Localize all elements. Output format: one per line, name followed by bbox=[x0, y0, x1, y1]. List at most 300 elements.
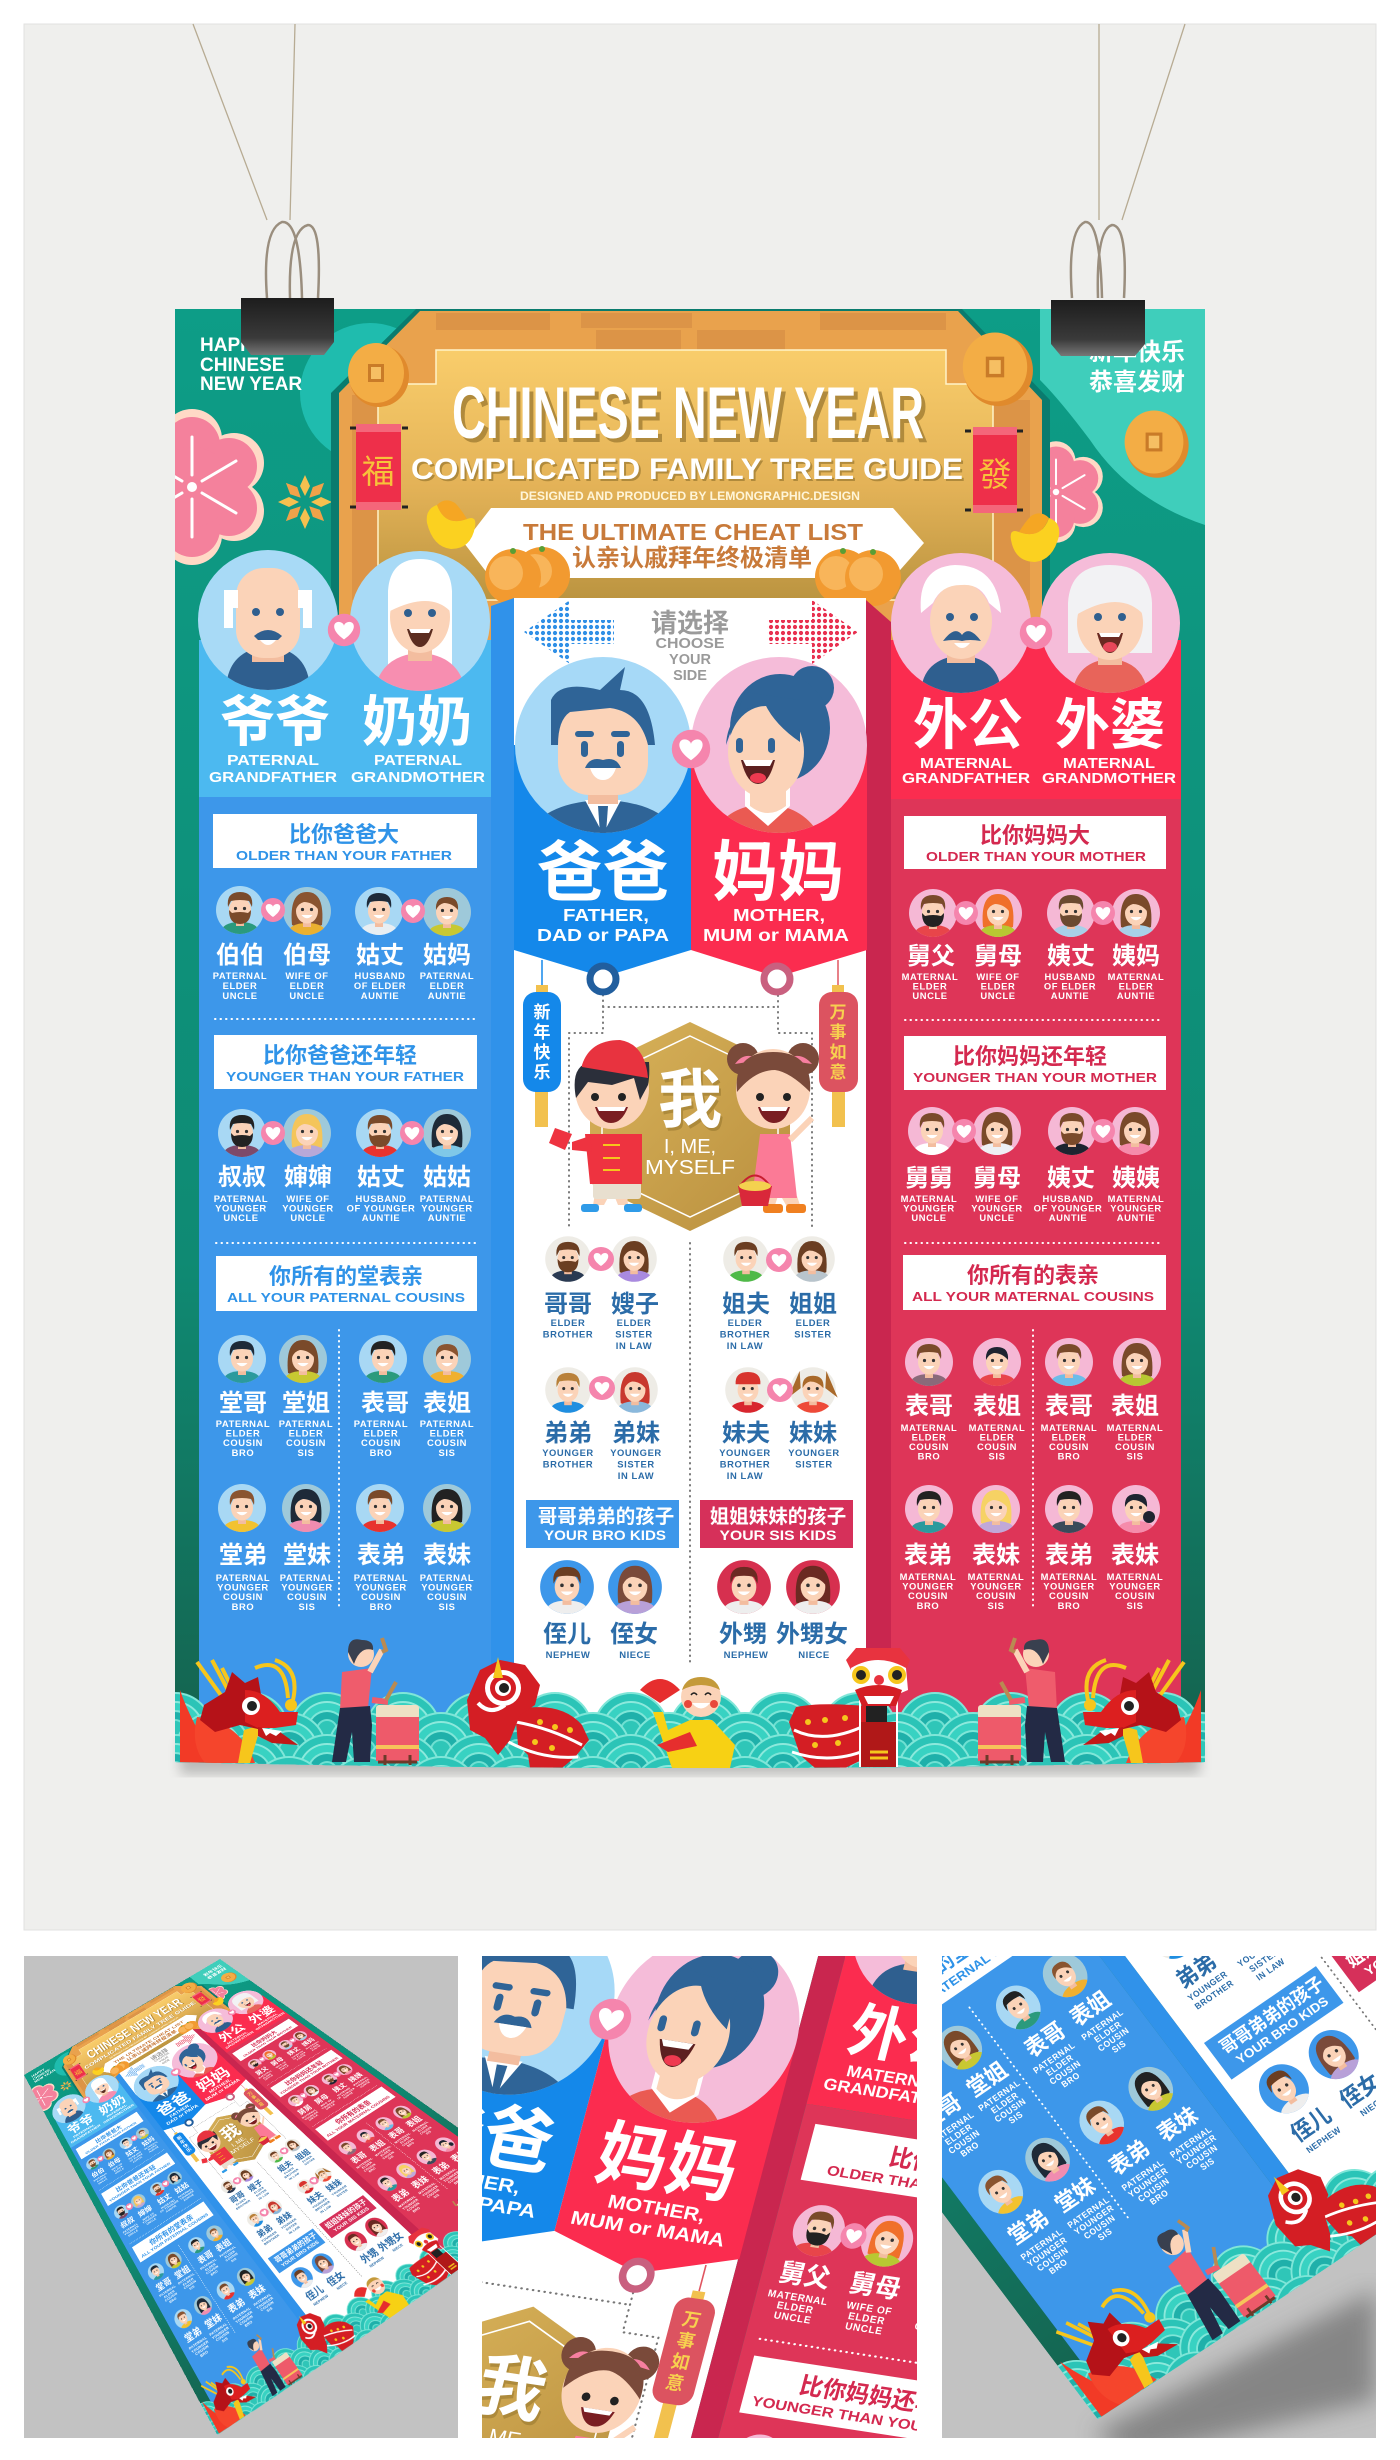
person 外甥女: 外甥女 bbox=[776, 1621, 848, 1648]
grandparent labels paternal: PATERNAL bbox=[227, 752, 319, 769]
person 姑妈: 姑妈 bbox=[423, 942, 471, 969]
loose coin bbox=[1125, 410, 1189, 478]
person 表哥 2: COUSIN bbox=[1049, 1441, 1089, 1452]
person 舅舅: MATERNAL bbox=[901, 1193, 957, 1204]
person 表弟 1: MATERNAL bbox=[900, 1571, 956, 1582]
center white column bbox=[514, 598, 866, 1770]
person 嫂子: SISTER bbox=[615, 1328, 653, 1340]
person 堂妹: SIS bbox=[299, 1601, 315, 1612]
mother ring bbox=[764, 966, 790, 992]
subtitle: COMPLICATED FAMILY TREE GUIDE bbox=[411, 453, 963, 486]
blue lantern: 年 bbox=[534, 1022, 550, 1042]
choose your side: SIDE bbox=[673, 668, 707, 684]
person 外甥女 bbox=[776, 1560, 848, 1661]
header cousins maternal bbox=[903, 1255, 1166, 1310]
cheat list banner: 认亲认戚拜年终极清单 bbox=[572, 545, 812, 572]
paternal section: younger bbox=[214, 1035, 477, 1223]
greeting chinese: 恭喜发财 bbox=[1089, 369, 1185, 396]
heart bbox=[401, 899, 425, 923]
grandfather paternal portrait bbox=[198, 550, 338, 692]
grandparent labels maternal: MATERNAL bbox=[920, 755, 1012, 772]
choose your side bbox=[651, 608, 729, 684]
grandparent labels maternal bbox=[902, 755, 1176, 787]
person 弟妹: SISTER bbox=[617, 1458, 655, 1470]
person 姨丈 younger bbox=[1034, 1107, 1102, 1223]
person 舅舅: 舅舅 bbox=[905, 1165, 953, 1192]
person 表妹 1: 表妹 bbox=[972, 1542, 1020, 1569]
person 姨丈: 姨丈 bbox=[1047, 943, 1095, 970]
person 姨丈: HUSBAND bbox=[1044, 971, 1096, 982]
person 表弟 1 bbox=[900, 1485, 956, 1611]
me hexagon bbox=[590, 1022, 790, 1231]
waves bbox=[99, 1692, 1277, 1832]
header cousins maternal: ALL YOUR MATERNAL COUSINS bbox=[912, 1289, 1154, 1304]
person 姑丈 younger bbox=[347, 1109, 415, 1223]
teal decorations bbox=[300, 309, 1205, 525]
header younger than mother: 比你妈妈还年轻 bbox=[953, 1044, 1107, 1069]
person 表姐 1: 表姐 bbox=[973, 1393, 1021, 1420]
right gold ingot bbox=[1011, 513, 1059, 562]
header cousins paternal: ALL YOUR PATERNAL COUSINS bbox=[227, 1290, 465, 1305]
person 表姐 1 bbox=[969, 1338, 1025, 1462]
person 堂姐: ELDER bbox=[289, 1428, 323, 1439]
blue lantern: 乐 bbox=[534, 1063, 550, 1082]
heart bbox=[766, 1248, 792, 1272]
person 妹妹 bbox=[788, 1367, 840, 1470]
person 姑丈: AUNTIE bbox=[361, 990, 399, 1001]
person 姑丈 younger: OF YOUNGER bbox=[347, 1202, 415, 1214]
person 妹夫: 妹夫 bbox=[722, 1420, 770, 1447]
person 姐夫: 姐夫 bbox=[722, 1291, 770, 1318]
person 堂哥: COUSIN bbox=[223, 1437, 263, 1448]
header older than mother bbox=[904, 816, 1166, 869]
title: CHINESE NEW YEAR bbox=[456, 377, 928, 458]
person 哥哥: 哥哥 bbox=[544, 1291, 592, 1318]
person 姨妈: ELDER bbox=[1119, 981, 1153, 992]
person 姐姐: ELDER bbox=[796, 1317, 830, 1328]
person 堂姐: PATERNAL bbox=[279, 1418, 333, 1429]
person 姨姨: MATERNAL bbox=[1108, 1193, 1164, 1204]
gold flower bbox=[278, 475, 332, 529]
father banner: 爸爸 bbox=[537, 835, 669, 909]
person 表哥 2 bbox=[1041, 1338, 1097, 1462]
person 伯母: WIFE OF bbox=[285, 970, 329, 981]
person 表姐 2: COUSIN bbox=[1115, 1441, 1155, 1452]
header sis kids bbox=[700, 1500, 853, 1548]
person 表姐 1: SIS bbox=[989, 1450, 1005, 1462]
maternal section: cousins bbox=[900, 1255, 1166, 1611]
person 表姐 2: SIS bbox=[1127, 1450, 1143, 1462]
family tree dotted lines bbox=[569, 990, 812, 1664]
person 舅母 bbox=[974, 889, 1022, 1001]
red lantern: 万 bbox=[830, 1003, 846, 1022]
grandparent names paternal: 爷爷 bbox=[220, 691, 330, 753]
person 舅父: ELDER bbox=[913, 981, 947, 992]
person 表弟 1: YOUNGER bbox=[902, 1581, 954, 1592]
person 姑丈 younger: 姑丈 bbox=[357, 1164, 405, 1191]
left scroll: 福 bbox=[362, 453, 394, 490]
person 舅母 younger: UNCLE bbox=[979, 1212, 1015, 1223]
person 表妹 2: SIS bbox=[1127, 1600, 1143, 1611]
heart bbox=[589, 1376, 615, 1400]
header younger than mother bbox=[904, 1036, 1166, 1090]
person 伯伯: UNCLE bbox=[222, 990, 258, 1001]
person 舅母: WIFE OF bbox=[976, 971, 1020, 982]
me hexagon: 我 bbox=[658, 1064, 722, 1136]
person 堂哥: BRO bbox=[232, 1447, 254, 1458]
person 舅母 younger bbox=[971, 1107, 1023, 1223]
right coin bbox=[963, 332, 1033, 406]
person 表妹: YOUNGER bbox=[421, 1582, 473, 1593]
person 表妹 1: COUSIN bbox=[976, 1590, 1016, 1601]
title frame bbox=[331, 309, 1050, 660]
person 伯伯: PATERNAL bbox=[213, 970, 267, 981]
person 姑丈: 姑丈 bbox=[356, 942, 404, 969]
person 堂弟: YOUNGER bbox=[217, 1582, 269, 1593]
person 伯母: ELDER bbox=[290, 980, 324, 991]
person 妹夫: YOUNGER bbox=[719, 1447, 771, 1458]
person 姐夫: BROTHER bbox=[720, 1328, 770, 1340]
person 哥哥: BROTHER bbox=[543, 1328, 593, 1340]
header cousins paternal: 你所有的堂表亲 bbox=[269, 1264, 423, 1289]
person 姨姨: YOUNGER bbox=[1110, 1203, 1162, 1214]
person 姑丈: HUSBAND bbox=[354, 970, 406, 981]
person 表弟: COUSIN bbox=[361, 1591, 401, 1602]
pink flower right bbox=[1009, 441, 1103, 543]
person 侄儿 bbox=[540, 1560, 594, 1661]
grandfather maternal portrait bbox=[891, 553, 1031, 695]
heart maternal grandparents bbox=[1020, 617, 1052, 649]
grandparent names paternal bbox=[220, 691, 472, 753]
heart parents bbox=[672, 730, 710, 768]
green background bbox=[175, 309, 1205, 1774]
credit: DESIGNED AND PRODUCED BY LEMONGRAPHIC.DESIGN bbox=[520, 491, 860, 503]
person 表妹 bbox=[420, 1484, 474, 1612]
person 表哥 1 bbox=[901, 1338, 957, 1462]
hanging strings bbox=[193, 24, 1185, 220]
person 姑姑: PATERNAL bbox=[420, 1193, 474, 1204]
person 表弟: BRO bbox=[370, 1601, 392, 1612]
grandparent names maternal bbox=[913, 694, 1165, 756]
person 妹妹: SISTER bbox=[795, 1458, 833, 1470]
person 姨丈: AUNTIE bbox=[1051, 990, 1089, 1001]
person 表哥 1: ELDER bbox=[912, 1432, 946, 1442]
blue dotted arrow bbox=[524, 600, 614, 664]
red lantern bbox=[819, 960, 858, 1127]
right binder clip bbox=[1051, 222, 1145, 356]
dragon right bbox=[1083, 1660, 1201, 1763]
blue lantern: 快 bbox=[534, 1043, 550, 1062]
detail panel: angled whole poster bbox=[24, 1956, 458, 2438]
person 堂哥: PATERNAL bbox=[216, 1418, 270, 1429]
grandparent labels maternal: GRANDFATHER bbox=[902, 770, 1030, 787]
header younger than mother: YOUNGER THAN YOUR MOTHER bbox=[913, 1070, 1158, 1085]
person 堂妹: PATERNAL bbox=[280, 1572, 334, 1583]
person 表姐 1: COUSIN bbox=[977, 1441, 1017, 1452]
header older than father bbox=[213, 814, 477, 868]
person 姨丈 younger: 姨丈 bbox=[1047, 1165, 1095, 1192]
person 姨妈: 姨妈 bbox=[1112, 943, 1160, 970]
person 姐姐: SISTER bbox=[794, 1328, 832, 1340]
person 表哥 1: BRO bbox=[918, 1450, 940, 1462]
person 堂妹: YOUNGER bbox=[281, 1582, 333, 1593]
right oranges bbox=[815, 548, 901, 606]
person 表姐 2: ELDER bbox=[1118, 1432, 1152, 1442]
person 伯伯: ELDER bbox=[223, 980, 257, 991]
maternal side column bbox=[866, 600, 1181, 1770]
siblings block bbox=[542, 1236, 840, 1481]
choose your side: CHOOSE bbox=[656, 636, 725, 652]
person 叔叔 bbox=[214, 1109, 268, 1223]
person 舅父: 舅父 bbox=[907, 943, 955, 970]
person 姑丈 bbox=[354, 887, 406, 1001]
person 舅父: MATERNAL bbox=[902, 971, 958, 982]
person 表哥: ELDER bbox=[364, 1428, 398, 1439]
person 姨姨 bbox=[1108, 1107, 1164, 1223]
mother banner: MUM or MAMA bbox=[703, 925, 849, 945]
person 表弟: 表弟 bbox=[357, 1542, 405, 1569]
heart bbox=[1091, 1119, 1115, 1143]
person 伯伯 bbox=[213, 886, 267, 1001]
red lantern: 事 bbox=[830, 1023, 846, 1042]
person 舅舅 bbox=[901, 1107, 957, 1223]
header older than father: OLDER THAN YOUR FATHER bbox=[236, 848, 453, 863]
person 表姐: SIS bbox=[439, 1447, 455, 1458]
heart bbox=[400, 1121, 424, 1145]
person 侄女 bbox=[608, 1560, 662, 1661]
header older than mother: OLDER THAN YOUR MOTHER bbox=[926, 849, 1147, 864]
person 姑妈 bbox=[420, 888, 474, 1001]
person 舅父: UNCLE bbox=[912, 990, 948, 1001]
person 表哥 1: MATERNAL bbox=[901, 1422, 957, 1433]
person 舅母 younger: YOUNGER bbox=[971, 1203, 1023, 1214]
maternal section: older bbox=[902, 816, 1166, 1001]
person 表妹: 表妹 bbox=[423, 1542, 471, 1569]
person 姨妈: AUNTIE bbox=[1117, 990, 1155, 1001]
person 姨丈: OF ELDER bbox=[1044, 981, 1096, 992]
person 弟弟: 弟弟 bbox=[544, 1420, 592, 1447]
choose your side: 请选择 bbox=[651, 608, 729, 638]
person 表哥: BRO bbox=[370, 1447, 392, 1458]
person 堂妹: 堂妹 bbox=[283, 1542, 331, 1569]
person 叔叔: YOUNGER bbox=[215, 1202, 267, 1214]
person 舅舅: UNCLE bbox=[911, 1212, 947, 1223]
person 表哥 2: ELDER bbox=[1052, 1432, 1086, 1442]
person 表弟: PATERNAL bbox=[354, 1572, 408, 1583]
father banner bbox=[514, 745, 691, 977]
person 侄女: 侄女 bbox=[610, 1621, 658, 1648]
person 弟妹: YOUNGER bbox=[610, 1447, 662, 1458]
header older than mother: 比你妈妈大 bbox=[980, 823, 1090, 848]
person 表弟 bbox=[354, 1484, 408, 1612]
person 表哥 1: 表哥 bbox=[905, 1393, 953, 1420]
person 表妹 2: YOUNGER bbox=[1109, 1581, 1161, 1592]
left oranges bbox=[485, 546, 570, 605]
mother banner: MOTHER, bbox=[733, 905, 825, 925]
person 堂姐 bbox=[279, 1335, 333, 1458]
boy with red packet bbox=[549, 1040, 649, 1212]
person 堂哥: 堂哥 bbox=[219, 1390, 267, 1417]
person 姑丈 younger: HUSBAND bbox=[355, 1193, 407, 1204]
person 表弟 1: 表弟 bbox=[904, 1542, 952, 1569]
person 姐姐: 姐姐 bbox=[789, 1291, 837, 1318]
pink flower left bbox=[120, 409, 264, 565]
person 外甥 bbox=[717, 1560, 771, 1661]
person 叔叔: PATERNAL bbox=[214, 1193, 268, 1204]
person 婶婶: UNCLE bbox=[290, 1212, 326, 1223]
me hexagon: MYSELF bbox=[645, 1157, 735, 1179]
person 姑姑 bbox=[420, 1109, 474, 1223]
person 弟妹 bbox=[610, 1367, 662, 1481]
person 舅母: UNCLE bbox=[980, 990, 1016, 1001]
person 弟弟: YOUNGER bbox=[542, 1447, 594, 1458]
grandparent names maternal: 外公 bbox=[913, 694, 1023, 756]
person 舅母 younger: WIFE OF bbox=[975, 1193, 1019, 1204]
person 舅母: 舅母 bbox=[974, 943, 1022, 970]
person 表弟 2: 表弟 bbox=[1045, 1542, 1093, 1569]
paternal side column bbox=[199, 598, 514, 1770]
grandparent names paternal: 奶奶 bbox=[362, 691, 472, 753]
person 表哥 bbox=[354, 1335, 409, 1458]
subtitle: COMPLICATED FAMILY TREE GUIDE bbox=[413, 455, 965, 488]
header cousins paternal bbox=[216, 1256, 477, 1311]
person 姨妈 bbox=[1108, 889, 1164, 1001]
person 舅舅: YOUNGER bbox=[903, 1203, 955, 1214]
person 弟妹: 弟妹 bbox=[612, 1420, 660, 1447]
person 姐夫: ELDER bbox=[728, 1317, 762, 1328]
person 外甥: 外甥 bbox=[719, 1621, 767, 1648]
poster bbox=[99, 309, 1277, 1832]
person 嫂子: 嫂子 bbox=[611, 1291, 659, 1318]
red dotted arrow bbox=[767, 600, 858, 664]
heart bbox=[767, 1378, 793, 1402]
person 姨姨: 姨姨 bbox=[1112, 1165, 1160, 1192]
title: CHINESE NEW YEAR bbox=[452, 373, 924, 454]
person 表姐 2 bbox=[1107, 1338, 1163, 1462]
person 表哥: COUSIN bbox=[361, 1437, 401, 1448]
person 表弟 2: YOUNGER bbox=[1043, 1581, 1095, 1592]
person 妹夫 bbox=[719, 1367, 771, 1481]
person 婶婶: YOUNGER bbox=[282, 1202, 334, 1214]
person 表姐 bbox=[420, 1335, 474, 1458]
person 表姐: ELDER bbox=[430, 1428, 464, 1439]
person 表妹: COUSIN bbox=[427, 1591, 467, 1602]
person 侄儿: 侄儿 bbox=[543, 1621, 591, 1648]
blue lantern: 新 bbox=[534, 1002, 550, 1022]
person 表姐 2: MATERNAL bbox=[1107, 1422, 1163, 1433]
person 妹妹: 妹妹 bbox=[789, 1420, 837, 1447]
person 婶婶: 婶婶 bbox=[284, 1164, 332, 1191]
person 妹夫: IN LAW bbox=[727, 1470, 763, 1481]
person 表妹 1: MATERNAL bbox=[968, 1571, 1024, 1582]
left gold ingot bbox=[427, 500, 475, 549]
person 表妹 1: SIS bbox=[988, 1600, 1004, 1611]
person 姨丈 bbox=[1044, 889, 1096, 1001]
me hexagon: 我 bbox=[660, 1067, 724, 1139]
person 伯母: 伯母 bbox=[283, 942, 331, 969]
person 表姐: COUSIN bbox=[427, 1437, 467, 1448]
header older than father: 比你爸爸大 bbox=[289, 822, 399, 847]
heart bbox=[1091, 901, 1115, 925]
person 姑妈: PATERNAL bbox=[420, 970, 474, 981]
person 表姐: PATERNAL bbox=[420, 1418, 474, 1429]
photo backdrop bbox=[24, 24, 1376, 1930]
person 表弟 2: COUSIN bbox=[1049, 1590, 1089, 1601]
grandparent labels paternal: GRANDMOTHER bbox=[351, 769, 485, 786]
greeting chinese: 新年快乐 bbox=[1089, 339, 1185, 366]
heart bbox=[588, 1247, 614, 1271]
person 哥哥: ELDER bbox=[551, 1317, 585, 1328]
father banner: DAD or PAPA bbox=[537, 925, 669, 945]
person 表姐 2: 表姐 bbox=[1111, 1393, 1159, 1420]
person 姐夫 bbox=[720, 1236, 770, 1351]
person 表姐 1: MATERNAL bbox=[969, 1422, 1025, 1433]
person 婶婶: WIFE OF bbox=[286, 1193, 330, 1204]
person 表弟 1: COUSIN bbox=[908, 1590, 948, 1601]
person 妹妹: YOUNGER bbox=[788, 1447, 840, 1458]
person 堂妹: COUSIN bbox=[287, 1591, 327, 1602]
person 嫂子 bbox=[611, 1236, 659, 1351]
mother banner bbox=[691, 745, 867, 977]
person 表弟 2: MATERNAL bbox=[1041, 1571, 1097, 1582]
person 堂哥: ELDER bbox=[226, 1428, 260, 1439]
grandparent labels paternal: PATERNAL bbox=[374, 752, 462, 769]
person 姨丈 younger: HUSBAND bbox=[1042, 1193, 1094, 1204]
header sis kids: 姐姐妹妹的孩子 bbox=[710, 1505, 846, 1528]
header younger than father: 比你爸爸还年轻 bbox=[263, 1043, 417, 1068]
mother portrait bbox=[691, 657, 867, 840]
person 表妹 2: COUSIN bbox=[1115, 1590, 1155, 1601]
person 堂弟: COUSIN bbox=[223, 1591, 263, 1602]
person 姑丈: OF ELDER bbox=[354, 980, 406, 991]
person 侄女: NIECE bbox=[619, 1650, 651, 1661]
person 表哥: PATERNAL bbox=[354, 1418, 408, 1429]
person 姑姑: AUNTIE bbox=[428, 1212, 466, 1223]
mother banner: 妈妈 bbox=[712, 835, 844, 909]
person 弟妹: IN LAW bbox=[618, 1470, 654, 1481]
person 表弟: YOUNGER bbox=[355, 1582, 407, 1593]
cheat list banner bbox=[464, 508, 924, 578]
header bro kids: 哥哥弟弟的孩子 bbox=[538, 1505, 674, 1528]
red lantern: 如 bbox=[830, 1043, 846, 1062]
lion dancer left bbox=[467, 1657, 589, 1768]
person 舅母: ELDER bbox=[981, 981, 1015, 992]
person 表哥: 表哥 bbox=[361, 1390, 409, 1417]
heart bbox=[952, 1119, 976, 1143]
grandparent labels paternal: GRANDFATHER bbox=[209, 769, 337, 786]
person 堂姐: 堂姐 bbox=[282, 1390, 330, 1417]
grandparent labels paternal bbox=[209, 752, 485, 786]
blue lantern bbox=[523, 960, 561, 1127]
grandmother maternal portrait bbox=[1040, 553, 1180, 695]
heart paternal grandparents bbox=[328, 614, 360, 646]
person 表姐: 表姐 bbox=[423, 1390, 471, 1417]
person 表妹 1: YOUNGER bbox=[970, 1581, 1022, 1592]
grandparent names maternal: 外婆 bbox=[1055, 694, 1165, 756]
header younger than father bbox=[214, 1035, 477, 1089]
greeting english: NEW YEAR bbox=[200, 374, 302, 395]
paternal section: cousins bbox=[216, 1256, 477, 1612]
person 表妹: SIS bbox=[439, 1601, 455, 1612]
person 表妹 2: MATERNAL bbox=[1107, 1571, 1163, 1582]
person 表哥 2: BRO bbox=[1058, 1450, 1080, 1462]
choose your side: YOUR bbox=[669, 652, 711, 668]
person 表妹 2: 表妹 bbox=[1111, 1542, 1159, 1569]
person 表姐 1: ELDER bbox=[980, 1432, 1014, 1442]
person 伯母: UNCLE bbox=[289, 990, 325, 1001]
person 侄儿: NEPHEW bbox=[546, 1650, 590, 1661]
person 舅母 younger: 舅母 bbox=[973, 1165, 1021, 1192]
